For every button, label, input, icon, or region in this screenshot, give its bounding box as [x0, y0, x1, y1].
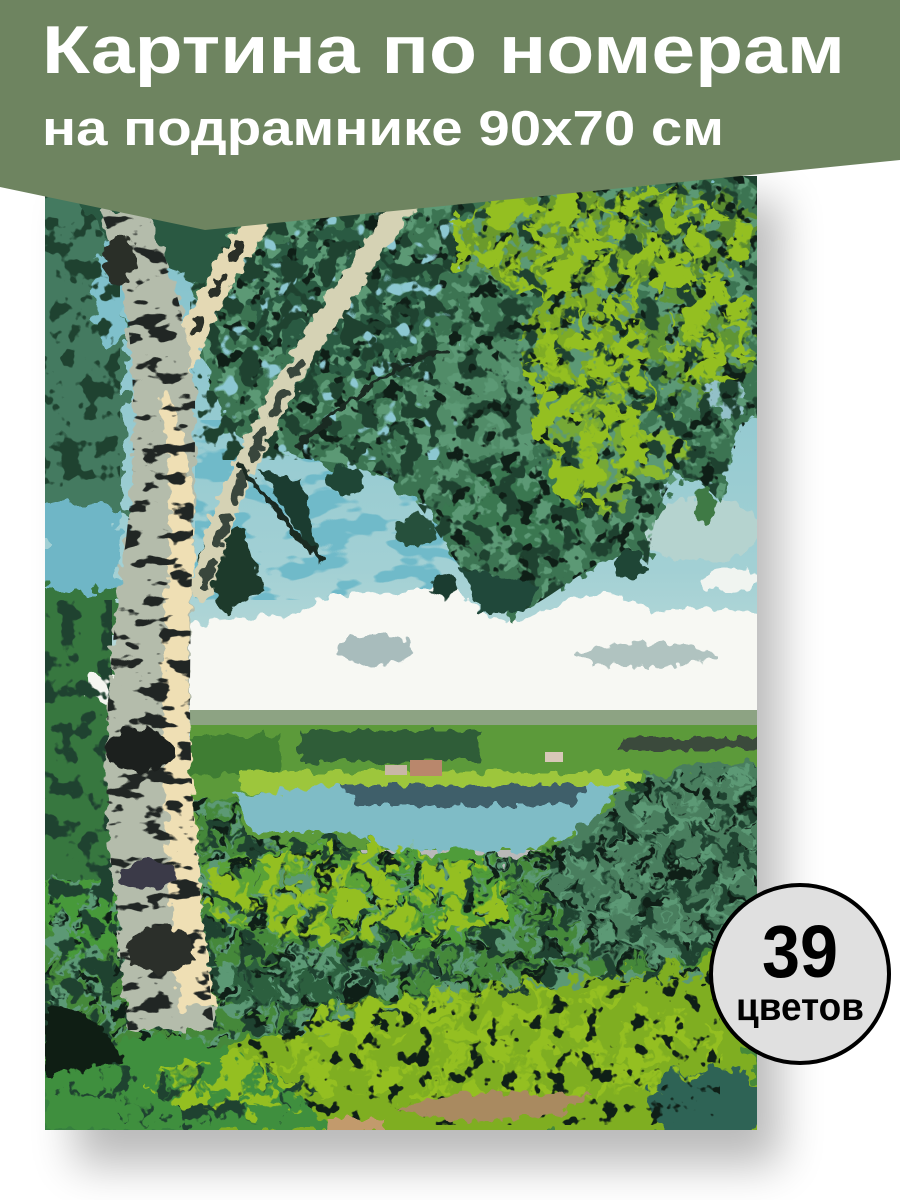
foreground grass — [45, 1003, 330, 1130]
left foliage and sky behind the trunk — [45, 197, 133, 882]
lime highlights in canopy — [450, 180, 755, 505]
tree canopy — [190, 170, 770, 612]
badge: 39 colours — [711, 885, 889, 1063]
left foliage mottling — [45, 176, 120, 1040]
canopy mottling — [190, 170, 770, 612]
hanging leaves — [55, 176, 717, 615]
header banner — [0, 0, 900, 230]
far fields — [190, 725, 760, 850]
sky — [45, 176, 757, 736]
distant horizon — [190, 710, 757, 725]
grass mottling — [60, 1055, 330, 1125]
badge: 39 colours: 39 — [762, 910, 838, 993]
birch branches — [178, 205, 445, 590]
birch trunk — [100, 210, 214, 1030]
lake — [235, 785, 620, 852]
badge: 39 colours: цветов — [736, 986, 864, 1029]
subtitle: на подрамнике 90х70 см — [42, 102, 724, 156]
village roofs — [385, 752, 563, 776]
lower shrubs and meadow — [30, 763, 780, 1150]
canvas shadow — [75, 200, 780, 1165]
title: Картина по номерам — [42, 12, 845, 88]
dirt path — [325, 1092, 590, 1132]
clouds — [190, 498, 760, 720]
darker sky patches — [195, 420, 458, 600]
shrub mottling — [45, 765, 760, 1040]
dark accents in meadow — [230, 975, 720, 1125]
lime highlights in meadow — [200, 847, 725, 1103]
painting: birch tree landscape — [30, 170, 780, 1150]
